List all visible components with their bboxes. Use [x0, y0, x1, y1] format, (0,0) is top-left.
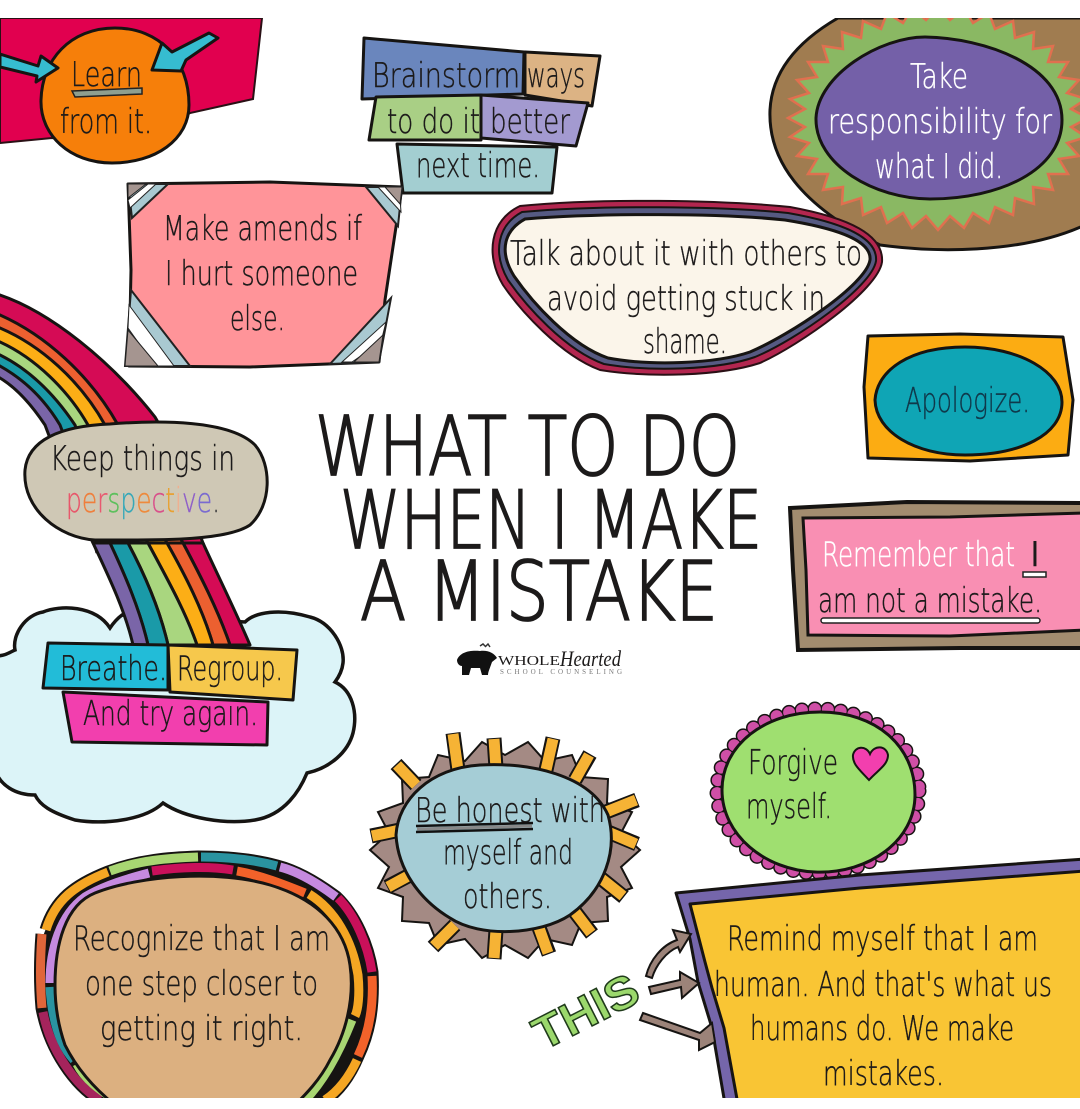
- icon: heart: [853, 747, 888, 780]
- text: avoid getting: avoid getting stuck in: [547, 279, 825, 319]
- arrow: middle: [649, 972, 699, 998]
- icon: right arrow: [152, 33, 218, 71]
- text: next time: next time.: [416, 146, 540, 186]
- rainbow foot over cloud: [93, 543, 250, 645]
- text: getting it right: getting it right.: [100, 1009, 303, 1049]
- pink inner: [803, 513, 1080, 636]
- text: regroup: Regroup.: [177, 649, 283, 689]
- maroon outer ring: [493, 201, 882, 375]
- text: brainstorm: Brainstorm: [372, 56, 520, 96]
- text: one step: one step closer to: [85, 964, 318, 1004]
- text: breathe: Breathe.: [60, 649, 167, 689]
- ring segments: [40, 857, 372, 1100]
- panel: forgive myself: [717, 709, 919, 873]
- text: forgive: Forgive: [748, 743, 838, 783]
- arrow: top: [646, 930, 691, 978]
- logo strapline: SCHOOL COUNSELING: [500, 668, 622, 676]
- purple frame: [676, 859, 1080, 1109]
- panel: talk about it: [493, 201, 882, 375]
- text: recognize: Recognize that I am: [73, 919, 330, 959]
- underline: I: [1023, 572, 1046, 577]
- text: and try again: And try again.: [83, 694, 258, 734]
- teal oval: [875, 347, 1062, 455]
- rays: [371, 733, 637, 959]
- block: teal: [397, 144, 557, 193]
- text: to do it: to do it: [387, 102, 480, 142]
- logo wordmark: WHOLE: [498, 654, 560, 669]
- bottom white margin: [0, 1098, 1080, 1109]
- callout: THIS: [524, 930, 715, 1060]
- title line 1: WHAT TO DO: [315, 400, 740, 495]
- logo script: Hearted: [559, 646, 622, 671]
- panel: keep things in perspective: [25, 422, 267, 540]
- icon: bear: [457, 651, 497, 675]
- text: what I did: what I did.: [875, 147, 1003, 187]
- text: make amends: Make amends if: [163, 209, 362, 249]
- panel: be honest: [370, 733, 640, 959]
- purple oval: [816, 37, 1062, 199]
- panel: brainstorm: [362, 38, 600, 193]
- scalloped edge: [717, 709, 919, 873]
- tan fill: [55, 876, 351, 1105]
- underline: [72, 88, 142, 97]
- block: yellow: [168, 645, 297, 700]
- logo: [457, 644, 622, 676]
- slate ring: [499, 207, 876, 369]
- text: THIS: THIS: [524, 963, 647, 1060]
- brown blob: [770, 18, 1080, 250]
- text: from it: from it.: [60, 102, 152, 142]
- photo corner: top right: [366, 187, 402, 226]
- photo corner: bottom right: [330, 298, 391, 364]
- panel: remind myself: [676, 859, 1080, 1109]
- green circle: [722, 712, 915, 872]
- title: [315, 400, 762, 640]
- cream fill: [505, 215, 870, 363]
- ring outlines: [40, 857, 372, 1100]
- orange frame: [864, 334, 1073, 461]
- beige pill: [25, 422, 267, 540]
- text: shame: shame.: [643, 322, 727, 362]
- text: myself and: myself and: [443, 833, 573, 873]
- panel: cloud breathe regroup: [0, 543, 355, 822]
- icon: left arrow: [0, 54, 58, 82]
- text: myself: myself.: [746, 787, 832, 827]
- text: perspective: perspective.: [66, 481, 220, 521]
- text: others: others.: [463, 877, 552, 917]
- text: mistakes: mistakes.: [823, 1054, 944, 1094]
- block: tan: [525, 52, 600, 106]
- title line 2: WHEN I MAKE: [340, 474, 762, 567]
- text: else: else.: [230, 299, 285, 339]
- arrow: bottom: [640, 1013, 715, 1050]
- text: keep things in: Keep things in: [50, 439, 235, 479]
- title line 3: A MISTAKE: [360, 545, 718, 640]
- panel: learn from it: [0, 18, 262, 163]
- text: talk about: Talk about it with others to: [510, 234, 862, 274]
- icon: birds: [480, 644, 490, 647]
- text: better: better: [490, 102, 570, 142]
- top white margin: [0, 0, 1080, 18]
- red backdrop: [0, 18, 262, 143]
- cloud: [0, 608, 355, 822]
- blue blob: [396, 765, 611, 932]
- panel: remember: [790, 502, 1080, 650]
- text: take: Take: [910, 57, 968, 97]
- text: learn: Learn: [71, 55, 142, 95]
- brown frame: [790, 502, 1080, 650]
- block: blue: [362, 38, 524, 99]
- yellow card: [690, 871, 1080, 1109]
- block: cyan: [43, 643, 168, 690]
- block: magenta: [63, 692, 268, 745]
- pink card: [128, 182, 402, 367]
- photo corner: top left: [128, 184, 168, 218]
- green zigzag: [788, 6, 1080, 230]
- text: ways: ways: [527, 56, 585, 96]
- text: hurt someone: I hurt someone: [165, 254, 358, 294]
- panel: recognize: [37, 854, 378, 1105]
- block: purple: [481, 95, 588, 146]
- panel: make amends: [125, 182, 402, 367]
- underline: honest: [416, 823, 533, 832]
- rainbow: [0, 293, 203, 572]
- panel: apologize: [864, 334, 1073, 461]
- text: I: I: [1028, 535, 1042, 575]
- spiky ring: [370, 742, 640, 958]
- underline: mistake: [821, 618, 1040, 623]
- black base ring: [37, 854, 378, 1105]
- text: be honest with: Be honest with: [415, 791, 605, 831]
- block: green: [369, 95, 481, 140]
- photo corner: bottom left: [125, 290, 190, 366]
- orange circle: [41, 28, 189, 163]
- panel: take responsibility: [770, 6, 1080, 250]
- text: apologize: Apologize.: [905, 381, 1030, 421]
